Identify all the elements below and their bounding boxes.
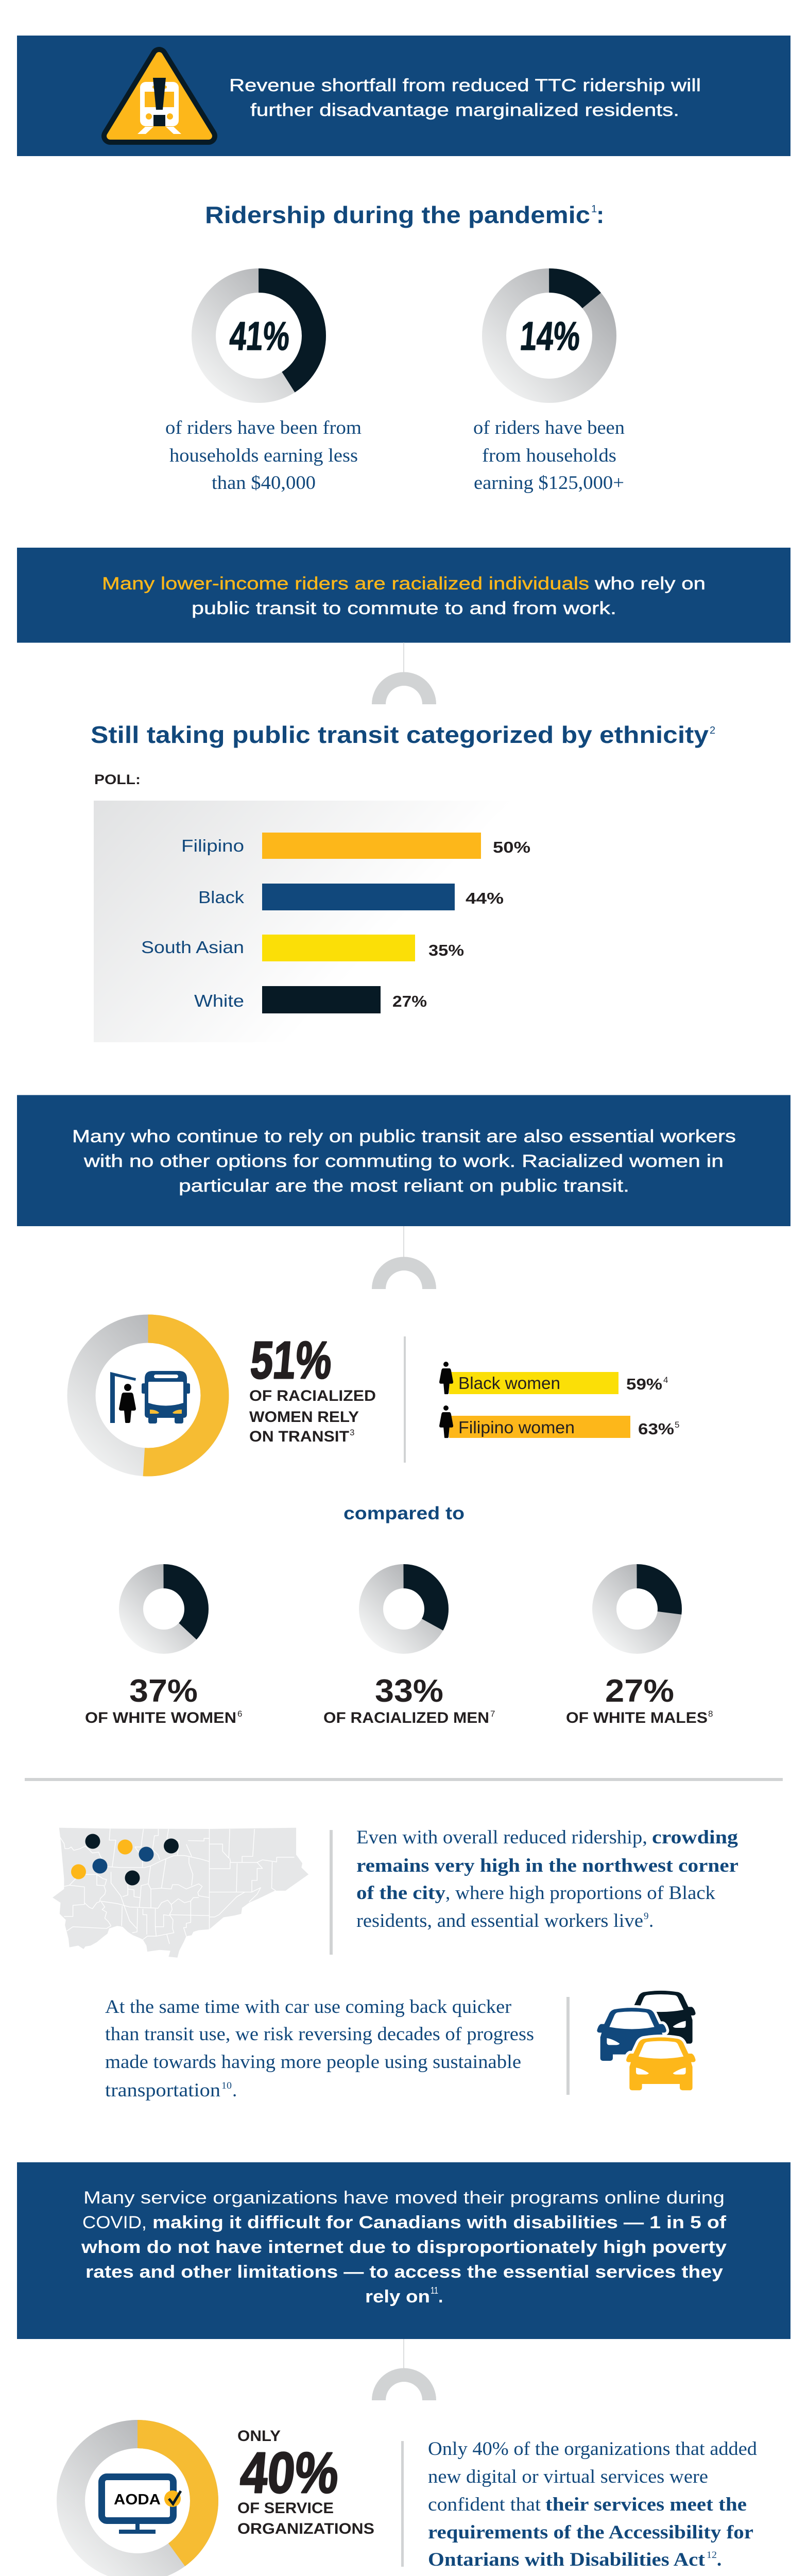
- bar: Black 44%: 44%: [466, 889, 504, 907]
- text: crowding in the northwest: crowding: [652, 1827, 738, 1848]
- panel: service organizations banner: .: [438, 2287, 443, 2307]
- map: Toronto wards with markers: [53, 1828, 308, 1958]
- panel: top banner: [17, 36, 790, 156]
- bar: Filipino women 63%: Filipino women: [458, 1418, 575, 1437]
- bar: Filipino 50%: [181, 833, 530, 859]
- text: crowding in the northwest: .: [649, 1910, 654, 1931]
- heading: still taking public transit: 2: [710, 725, 715, 736]
- text: riders over $125,000: from households: [482, 445, 616, 466]
- heading: ridership during the pandemic: 1: [591, 204, 597, 215]
- chart: poll bar chart: [94, 801, 530, 1042]
- text: riders under $40,000: households earning less: [169, 445, 358, 466]
- panel: essential workers banner: Many who continue to rely on public transit are also essential workers: [72, 1127, 736, 1146]
- panel: service organizations banner: Many service organizations have moved their programs online during: [83, 2188, 725, 2208]
- chart: racialized men 33%: OF RACIALIZED MEN: [323, 1709, 489, 1726]
- bar: Filipino 50%: 50%: [493, 838, 530, 856]
- text: AODA confidence: 12: [707, 2550, 717, 2561]
- text: car use coming back: made towards having more people using sustainable: [105, 2052, 521, 2073]
- text: crowding in the northwest: residents, and essential workers live: [356, 1910, 643, 1931]
- chart: donut 41%: 41%: [228, 313, 291, 359]
- text: car use coming back: [105, 1996, 534, 2101]
- bar: Black women 59%: Black women: [458, 1374, 560, 1393]
- stat: 51% of racialized women: WOMEN RELY: [249, 1409, 359, 1426]
- text: AODA confidence: new digital or virtual services were: [428, 2466, 708, 2487]
- text: AODA confidence: confident that: [428, 2494, 541, 2515]
- stat: only 40% of service organizations: [237, 2428, 374, 2537]
- icon: AODA monitor: [102, 2477, 181, 2534]
- text: car use coming back: .: [232, 2080, 237, 2101]
- panel: essential workers banner: [17, 1095, 790, 1226]
- panel: lower-income riders banner: who rely on: [594, 574, 706, 594]
- bar: Black women 59%: 4: [663, 1375, 668, 1385]
- heading: ridership during the pandemic: :: [596, 201, 604, 228]
- text: car use coming back: than transit use, we risk reversing decades of progress: [105, 2024, 534, 2045]
- text: crowding in the northwest: ,: [445, 1883, 450, 1904]
- panel: lower-income riders banner: [17, 548, 790, 643]
- stat: 51% of racialized women: 3: [350, 1428, 354, 1437]
- text: riders over $125,000: [473, 417, 625, 494]
- stat: only 40% of service organizations: OF SERVICE: [237, 2500, 334, 2517]
- chart: white males 27%: [566, 1577, 713, 1726]
- bar: Filipino women 63%: 63%: [638, 1420, 674, 1438]
- chart: donut 51%: [81, 1329, 215, 1462]
- text: car use coming back: At the same time with car use coming back quicker: [105, 1996, 511, 2018]
- text: riders under $40,000: than $40,000: [212, 472, 316, 494]
- text: AODA confidence: Only 40% of the organizations that added: [428, 2438, 758, 2460]
- bar: South Asian 35%: [141, 935, 464, 961]
- panel: service organizations banner: rates and other limitations — to access the essential services they: [85, 2262, 723, 2282]
- stat: 51% of racialized women: OF RACIALIZED: [249, 1387, 376, 1404]
- chart: racialized men 33%: 7: [490, 1709, 495, 1719]
- text: car use coming back: transportation: [105, 2080, 220, 2101]
- text: crowding in the northwest: remains very high in the northwest corner: [356, 1855, 738, 1876]
- chart: white women 37%: [85, 1577, 242, 1726]
- chart: donut 14%: [494, 280, 605, 391]
- text: AODA confidence: Ontarians with Disabilities Act: [428, 2549, 706, 2570]
- stat: only 40% of service organizations: ORGANIZATIONS: [237, 2520, 374, 2537]
- chart: racialized men 33%: 33%: [375, 1673, 443, 1709]
- bar: White 27%: White: [194, 991, 244, 1010]
- stat: 51% of racialized women: ON TRANSIT: [249, 1428, 349, 1445]
- panel: service organizations banner: [17, 2162, 790, 2339]
- text: riders over $125,000: of riders have been: [473, 417, 625, 438]
- bar: White 27%: [194, 986, 427, 1013]
- heading: compared to: compared to: [343, 1503, 465, 1523]
- chart: donut 14%: 14%: [519, 313, 582, 359]
- chart: white males 27%: OF WHITE MALES: [566, 1709, 708, 1726]
- connector arch 1: [372, 642, 436, 704]
- text: riders over $125,000: earning $125,000+: [474, 472, 624, 494]
- bar: Filipino women 63%: 5: [675, 1420, 679, 1430]
- text: crowding in the northwest: of the city: [356, 1883, 446, 1904]
- connector arch 2: [372, 1226, 436, 1289]
- chart: white women 37%: 37%: [129, 1673, 198, 1709]
- bar: White 27%: 27%: [392, 992, 427, 1010]
- icon: woman at bus shelter: [110, 1372, 136, 1423]
- text: AODA confidence: .: [717, 2549, 721, 2570]
- text: crowding in the northwest: where high proportions of Black: [455, 1883, 716, 1904]
- panel: service organizations banner: 11: [431, 2285, 438, 2296]
- text: riders under $40,000: of riders have been from: [165, 417, 362, 438]
- panel: lower-income riders banner: public transit to commute to and from work.: [192, 599, 616, 618]
- heading: still taking public transit: Still taking public transit categorized by ethnicity: [91, 721, 709, 748]
- banner text: Revenue shortfall from reduced TTC ridership will: [229, 76, 701, 95]
- bar: Black women 59%: 59%: [626, 1375, 662, 1393]
- label: poll: POLL:: [94, 772, 141, 787]
- panel: service organizations banner: COVID,: [82, 2213, 147, 2232]
- text: crowding in the northwest: [356, 1827, 738, 1931]
- bar: Black 44%: [198, 884, 504, 910]
- chart: white women 37%: OF WHITE WOMEN: [85, 1709, 236, 1726]
- heading: ridership during the pandemic: Ridership during the pandemic: [205, 201, 590, 228]
- icon: warning triangle with train: [110, 56, 209, 136]
- chart: white males 27%: 8: [708, 1709, 713, 1719]
- icon: bus: [142, 1371, 190, 1423]
- panel: essential workers banner: particular are the most reliant on public transit.: [179, 1176, 629, 1196]
- text: AODA confidence: [428, 2438, 758, 2570]
- icon: AODA monitor: AODA: [114, 2492, 161, 2508]
- connector arch 3: [372, 2339, 436, 2400]
- icon: three cars: [597, 1991, 696, 2090]
- text: crowding in the northwest: Even with overall reduced ridership,: [356, 1827, 647, 1848]
- bar: Black 44%: Black: [198, 888, 245, 907]
- panel: service organizations banner: whom do not have internet due to disproportionately high poverty: [81, 2238, 727, 2257]
- panel: essential workers banner: with no other options for commuting to work. Racialized women in: [83, 1151, 724, 1171]
- banner text: further disadvantage marginalized residents.: [250, 100, 679, 120]
- banner text: [229, 76, 701, 120]
- bar: South Asian 35%: 35%: [428, 941, 464, 959]
- bar: Filipino 50%: Filipino: [181, 836, 244, 855]
- chart: donut 40%: [71, 2434, 204, 2568]
- bar: Black women 59%: [439, 1362, 668, 1394]
- text: riders under $40,000: [165, 417, 362, 494]
- text: AODA confidence: requirements of the Accessibility for: [428, 2522, 753, 2543]
- chart: white males 27%: 27%: [605, 1673, 674, 1709]
- panel: service organizations banner: making it difficult for Canadians with disabilities — 1 in 5 of: [152, 2213, 727, 2232]
- panel: lower-income riders banner: Many lower-income riders are racialized individuals: [102, 574, 589, 594]
- chart: racialized men 33%: [323, 1577, 495, 1726]
- stat: 51% of racialized women: 51%: [248, 1330, 334, 1389]
- text: AODA confidence: their services meet the: [545, 2494, 747, 2515]
- text: crowding in the northwest: 9: [644, 1911, 649, 1922]
- stat: 51% of racialized women: [248, 1330, 376, 1445]
- text: car use coming back: 10: [221, 2080, 232, 2091]
- stat: only 40% of service organizations: 40%: [238, 2440, 341, 2505]
- chart: white women 37%: 6: [237, 1709, 242, 1719]
- panel: service organizations banner: rely on: [365, 2287, 430, 2307]
- chart: donut 41%: [204, 280, 314, 391]
- stat: only 40% of service organizations: ONLY: [237, 2428, 281, 2445]
- bar: South Asian 35%: South Asian: [141, 938, 244, 957]
- bar: Filipino women 63%: [439, 1405, 679, 1438]
